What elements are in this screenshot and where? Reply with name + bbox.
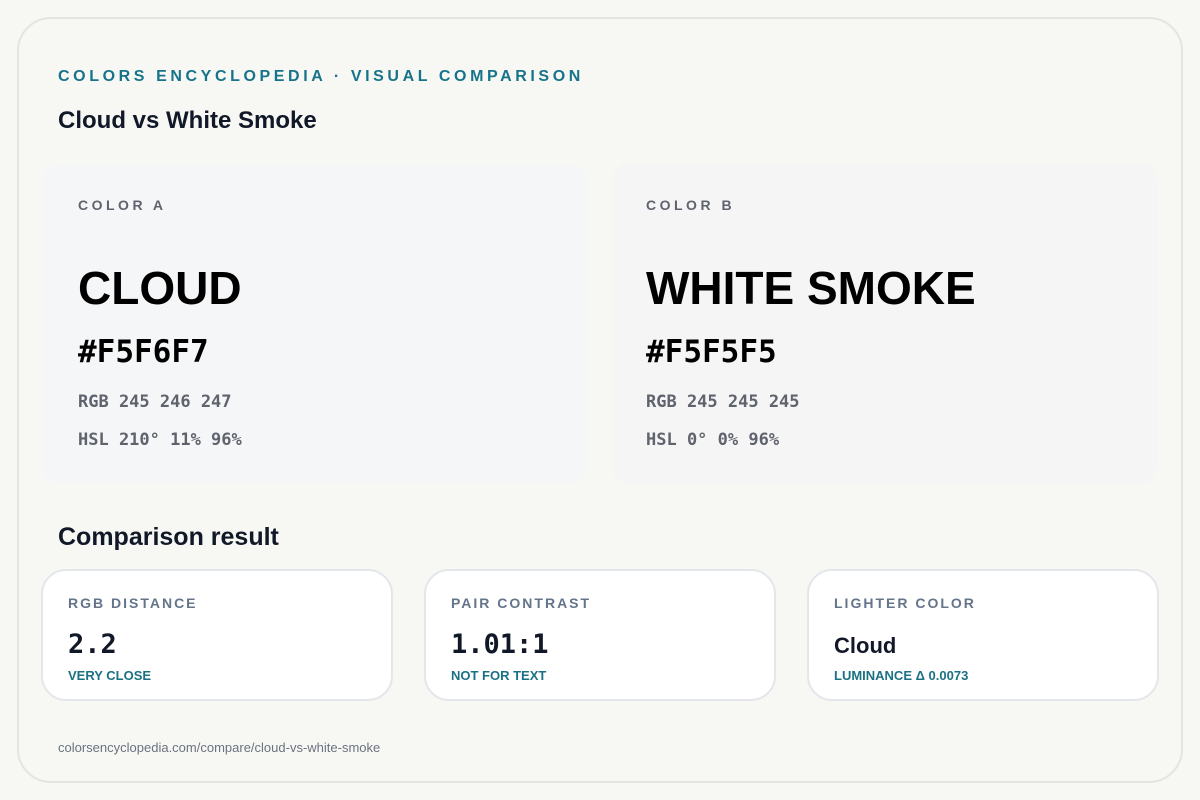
- card note: NOT FOR TEXT: [451, 668, 546, 683]
- card value: Cloud: [834, 633, 896, 658]
- color B HSL: HSL 0° 0% 96%: [646, 430, 779, 450]
- color A name: CLOUD: [78, 262, 242, 314]
- card: RGB distance: [41, 569, 393, 701]
- section heading: comparison result: Comparison result: [58, 523, 279, 551]
- card value: 1.01:1: [451, 629, 549, 660]
- color A hex: #F5F6F7: [78, 334, 209, 370]
- card label: RGB DISTANCE: [68, 595, 198, 611]
- panel: color B: [612, 164, 1157, 483]
- footer URL: colorsencyclopedia.com/compare/cloud-vs-white-smoke: [58, 740, 380, 755]
- card: lighter color: [807, 569, 1159, 701]
- card note: LUMINANCE Δ 0.0073: [834, 668, 968, 683]
- color B name: WHITE SMOKE: [646, 262, 976, 314]
- title: Cloud vs White Smoke: [58, 107, 317, 134]
- card label: LIGHTER COLOR: [834, 595, 976, 611]
- color B label: COLOR B: [646, 197, 735, 213]
- color A label: COLOR A: [78, 197, 167, 213]
- card note: VERY CLOSE: [68, 668, 151, 683]
- color B RGB: RGB 245 245 245: [646, 392, 800, 412]
- panel: color A: [42, 164, 587, 483]
- eyebrow heading: COLORS ENCYCLOPEDIA · VISUAL COMPARISON: [58, 68, 584, 85]
- color A RGB: RGB 245 246 247: [78, 392, 232, 412]
- card label: PAIR CONTRAST: [451, 595, 591, 611]
- color A HSL: HSL 210° 11% 96%: [78, 430, 242, 450]
- card value: 2.2: [68, 629, 117, 660]
- color B hex: #F5F5F5: [646, 334, 777, 370]
- card: pair contrast: [424, 569, 776, 701]
